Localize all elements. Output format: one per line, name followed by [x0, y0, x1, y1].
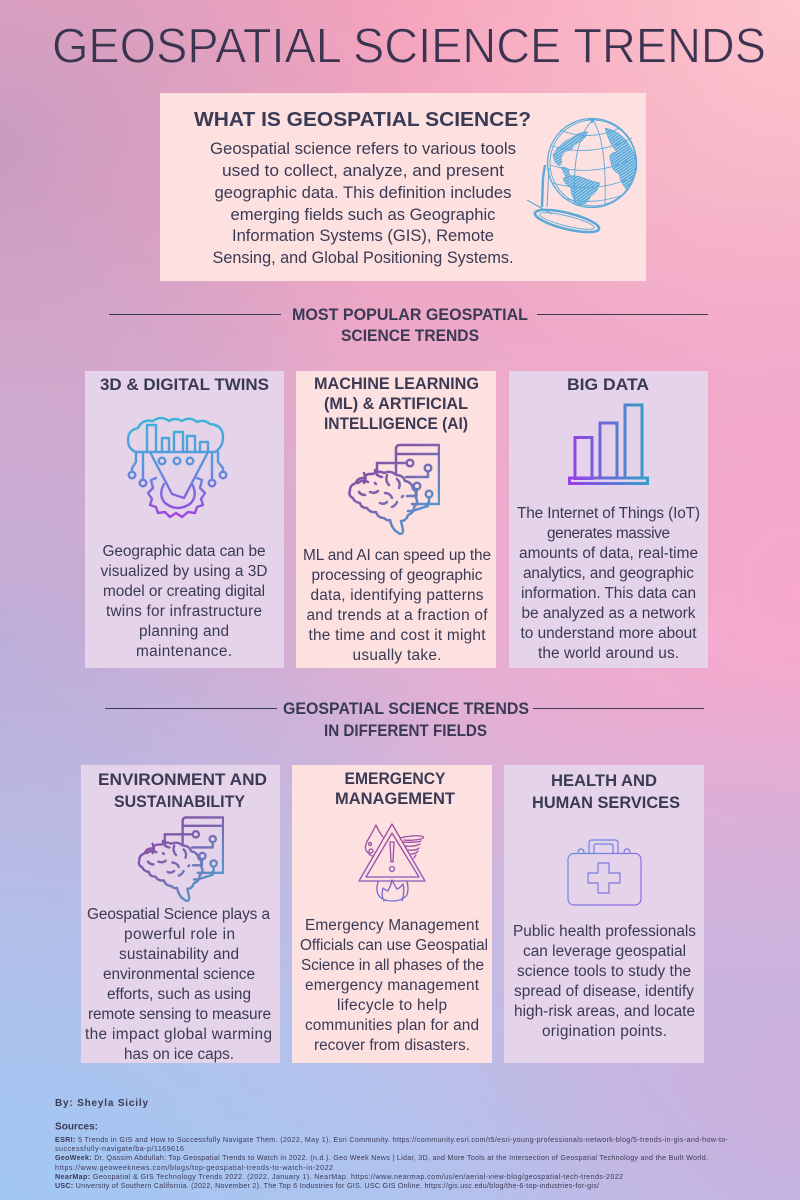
definition text: emerging fields such as Geographic	[230, 206, 496, 224]
section heading: most popular trends	[109, 305, 708, 345]
description: emergency management	[305, 977, 480, 994]
panel: what is geospatial science	[160, 93, 646, 281]
description: spread of disease, identify	[514, 983, 694, 1000]
section heading: most popular trends: SCIENCE TRENDS	[341, 326, 479, 345]
description: high-risk areas, and locate	[514, 1003, 695, 1020]
description	[100, 543, 268, 660]
description: The Internet of Things (IoT)	[517, 505, 700, 522]
description: the time and cost it might	[308, 627, 486, 644]
definition text: Sensing, and Global Positioning Systems.	[212, 249, 514, 267]
description	[303, 547, 491, 664]
description: data, identifying patterns	[310, 587, 484, 604]
description: information. This data can	[521, 585, 696, 602]
definition text: Information Systems (GIS), Remote	[232, 227, 494, 245]
description: be analyzed as a network	[522, 605, 696, 622]
sources list: GeoWeek: Dr. Qassim Abdullah: Top Geospatial Trends to Watch in 2022. (n.d.). Geo Week News | Lidar, 3D, and More Tools at the Intersection of Geospatial Technology and the Built World.	[55, 1154, 708, 1162]
panel: environment and sustainability	[81, 765, 280, 1063]
description: communities plan for and	[305, 1017, 479, 1034]
description: science tools to study the	[517, 963, 691, 980]
heading: EMERGENCY	[344, 769, 446, 788]
title: GEOSPATIAL SCIENCE TRENDS	[52, 20, 766, 74]
heading	[98, 770, 267, 811]
heading: ENVIRONMENT AND	[98, 770, 267, 789]
definition text: geographic data. This definition includes	[214, 184, 511, 202]
section heading: trends in different fields: GEOSPATIAL SCIENCE TRENDS	[283, 699, 529, 718]
description: planning and	[139, 623, 229, 640]
heading: 3D & DIGITAL TWINS	[100, 375, 269, 394]
panel: machine learning and AI	[296, 371, 496, 668]
description	[300, 917, 488, 1054]
description: model or creating digital	[103, 583, 265, 600]
heading: MANAGEMENT	[335, 789, 455, 808]
description: Public health professionals	[513, 923, 696, 940]
description: processing of geographic	[312, 567, 483, 584]
description: Geographic data can be	[102, 543, 266, 560]
heading: what is geospatial science: WHAT IS GEOSPATIAL SCIENCE?	[194, 108, 531, 131]
sources list: ESRI: 5 Trends in GIS and How to Successfully Navigate Them. (2022, May 1). Esri Community. https://community.esri.com/t5/esri-young-professionals-network-blog/5-trends-in-gis-and-how-to-	[55, 1136, 729, 1144]
heading: (ML) & ARTIFICIAL	[324, 394, 468, 413]
heading	[532, 771, 680, 812]
definition text: Geospatial science refers to various tools	[210, 140, 516, 158]
description: efforts, such as using	[107, 986, 251, 1003]
icon: cloud data funnel gear	[128, 418, 226, 517]
section heading: most popular trends: MOST POPULAR GEOSPATIAL	[292, 305, 528, 324]
description: powerful role in	[124, 926, 235, 943]
description: amounts of data, real-time	[519, 545, 698, 562]
panel: health and human services	[504, 765, 704, 1063]
sources list: https://www.geoweeknews.com/blogs/top-geospatial-trends-to-watch-in-2022	[55, 1164, 333, 1172]
icon: warning triangle with hazards	[359, 824, 425, 901]
description: twins for infrastructure	[106, 603, 262, 620]
description: Officials can use Geospatial	[300, 937, 488, 954]
sources list: USC: University of Southern California. (2022, November 2). The Top 6 Industries for GIS. USC GIS Online. https://gis.usc.edu/blog/the-6-top-industries-for-gis/	[55, 1182, 599, 1190]
heading: HEALTH AND	[551, 771, 657, 790]
sources list	[55, 1122, 729, 1190]
icon: brain with circuit	[349, 445, 439, 534]
description: analytics, and geographic	[523, 565, 694, 582]
description: generates massive	[547, 525, 670, 542]
description: maintenance.	[136, 643, 232, 660]
heading: SUSTAINABILITY	[114, 792, 245, 811]
panel: 3D and digital twins	[85, 371, 284, 668]
sources list: successfully-navigate/ba-p/1169616	[55, 1145, 184, 1153]
icon: globe	[527, 118, 637, 237]
description: sustainability and	[119, 946, 239, 963]
description: Science in all phases of the	[301, 957, 484, 974]
panel: emergency management	[292, 765, 492, 1063]
description: the impact global warming	[85, 1026, 272, 1043]
definition text	[210, 140, 516, 267]
description: to understand more about	[520, 625, 697, 642]
icon: brain with circuit	[139, 817, 223, 901]
description: and trends at a fraction of	[306, 607, 488, 624]
description: can leverage geospatial	[523, 943, 686, 960]
description: ML and AI can speed up the	[303, 547, 491, 564]
heading: MACHINE LEARNING	[314, 374, 479, 393]
description: environmental science	[103, 966, 255, 983]
heading: HUMAN SERVICES	[532, 793, 680, 812]
author credit: By: Sheyla Sicily	[55, 1098, 148, 1109]
section heading: trends in different fields	[105, 699, 704, 740]
description: remote sensing to measure	[88, 1006, 271, 1023]
heading: BIG DATA	[567, 375, 649, 394]
description: usually take.	[352, 647, 442, 664]
description: recover from disasters.	[314, 1037, 470, 1054]
description: origination points.	[542, 1023, 667, 1040]
section heading: trends in different fields: IN DIFFERENT FIELDS	[324, 721, 487, 740]
description: Geospatial Science plays a	[87, 906, 270, 923]
heading	[314, 374, 479, 433]
icon: first aid kit	[568, 840, 641, 905]
description	[513, 923, 696, 1040]
sources list: NearMap: Geospatial & GIS Technology Trends 2022. (2022, January 1). NearMap. https://www.nearmap.com/us/en/aerial-view-blog/geospatial-tech-trends-2022	[55, 1173, 623, 1181]
description	[517, 505, 700, 662]
heading	[335, 769, 455, 808]
icon: bar chart	[570, 405, 648, 484]
description	[85, 906, 272, 1063]
description: has on ice caps.	[124, 1046, 234, 1063]
description: visualized by using a 3D	[100, 563, 268, 580]
sources list: Sources:	[55, 1122, 98, 1132]
description: the world around us.	[538, 645, 679, 662]
definition text: used to collect, analyze, and present	[222, 162, 505, 180]
panel: big data	[509, 371, 708, 668]
description: lifecycle to help	[337, 997, 447, 1014]
description: Emergency Management	[305, 917, 480, 934]
heading: INTELLIGENCE (AI)	[324, 414, 468, 433]
